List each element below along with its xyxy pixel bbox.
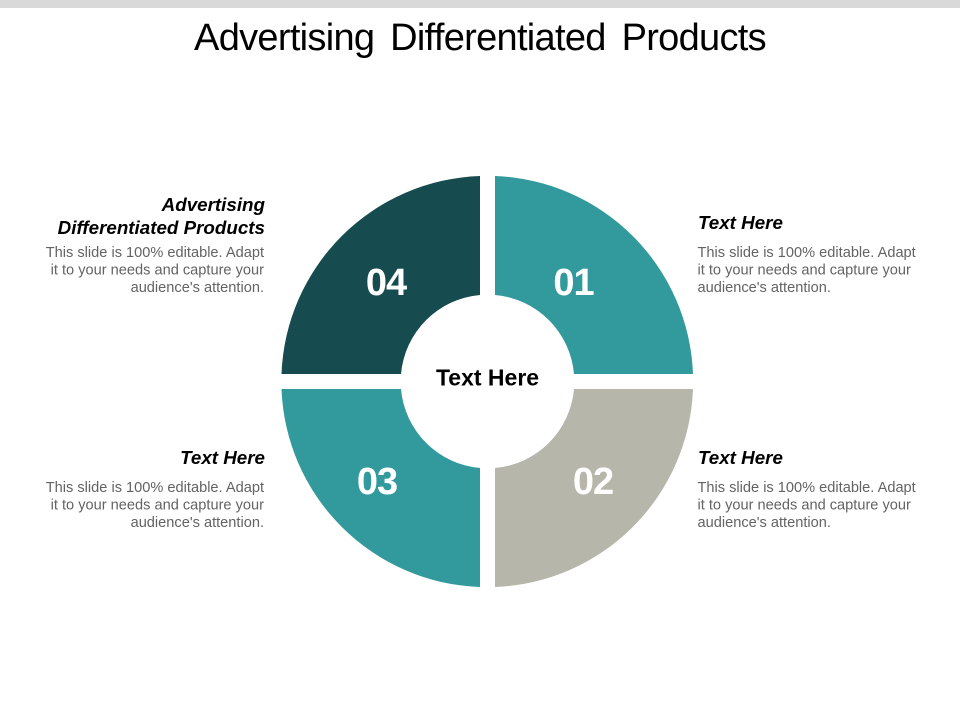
segment 02: 02: [573, 461, 613, 503]
segment 04: 04: [366, 262, 407, 304]
text block 01: it to your needs and capture your: [698, 262, 911, 278]
segment 04: [282, 176, 480, 374]
text block 04: This slide is 100% editable. Adapt: [46, 245, 264, 261]
segment 01: [495, 176, 693, 374]
text block 02: [698, 447, 916, 531]
text block 01: audience's attention.: [698, 280, 831, 296]
text block 02: audience's attention.: [698, 515, 831, 531]
center label: Text Here: [436, 364, 539, 390]
text block 03: [46, 447, 265, 531]
text block 02: Text Here: [698, 447, 783, 468]
text block 04: it to your needs and capture your: [51, 262, 264, 278]
text block 04: [46, 194, 266, 296]
segment 02: [495, 389, 693, 587]
text block 03: Text Here: [180, 447, 265, 468]
circular diagram: [282, 176, 693, 587]
text block 04: audience's attention.: [131, 280, 264, 296]
text block 01: This slide is 100% editable. Adapt: [698, 245, 916, 261]
segment 03: 03: [357, 461, 397, 503]
segment 01: 01: [553, 262, 594, 304]
text block 02: This slide is 100% editable. Adapt: [698, 480, 916, 496]
text block 01: [698, 212, 916, 296]
text block 04: Differentiated Products: [58, 217, 265, 238]
title: Advertising Differentiated Products: [194, 17, 766, 59]
text block 03: it to your needs and capture your: [51, 498, 264, 514]
text block 03: audience's attention.: [131, 515, 264, 531]
text block 01: Text Here: [698, 212, 783, 233]
text block 04: Advertising: [161, 194, 266, 215]
text block 02: it to your needs and capture your: [698, 498, 911, 514]
segment 03: [282, 389, 480, 587]
text block 03: This slide is 100% editable. Adapt: [46, 480, 264, 496]
